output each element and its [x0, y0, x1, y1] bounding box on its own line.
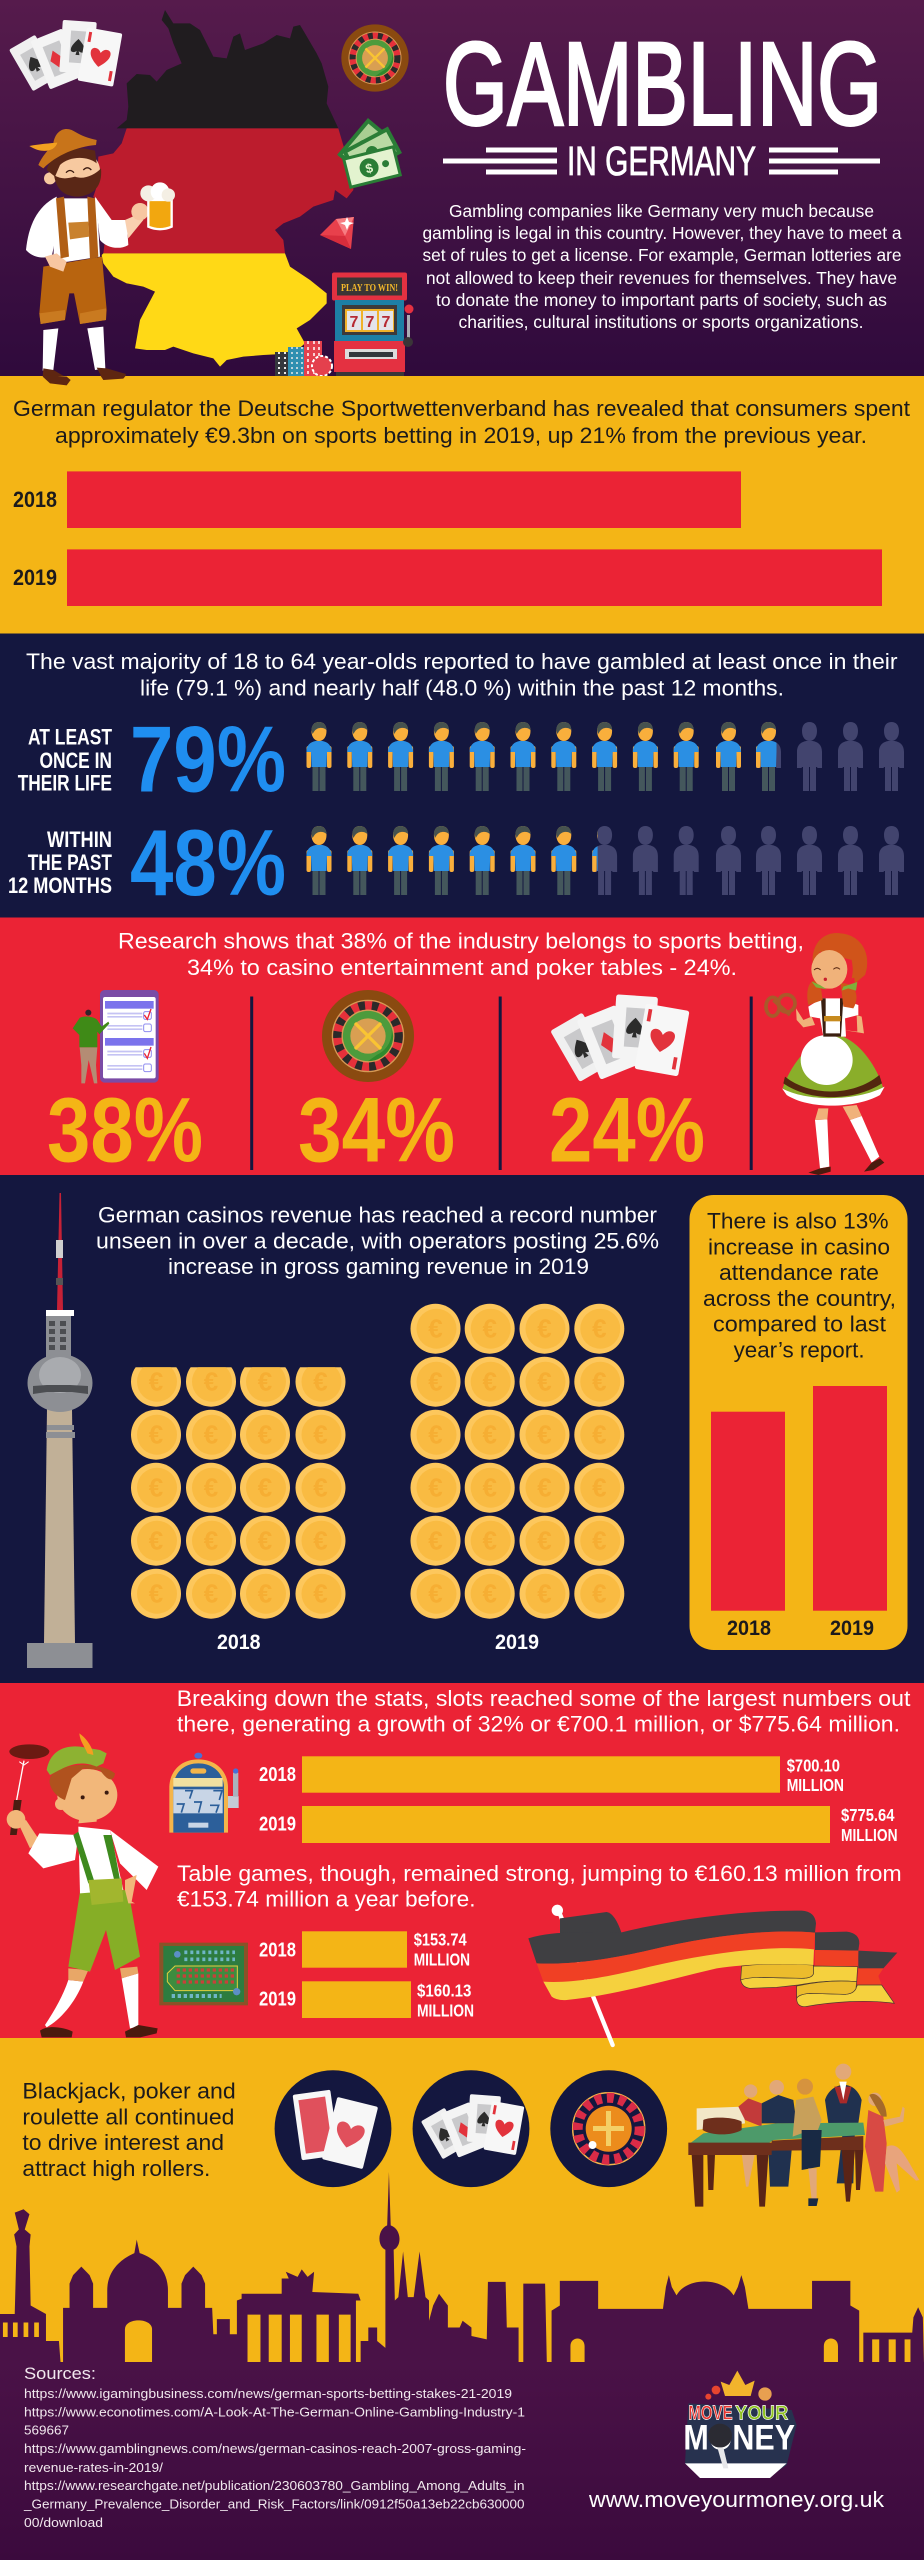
icon: casino chips: [275, 341, 332, 377]
bar chart: table games: MILLION: [417, 2001, 474, 2021]
icon: roulette wheel: [322, 990, 414, 1082]
coin stack: 2019: €: [592, 1314, 607, 1344]
label: at least once: AT LEAST: [28, 724, 112, 749]
illustration: Berlin skyline: [0, 2172, 924, 2365]
bar chart: sports betting: 2018: [13, 487, 57, 512]
stat: 48%: 48%: [130, 810, 286, 915]
sources: revenue-rates-in-2019/: [24, 2461, 164, 2475]
coin stack: 2018: €: [313, 1579, 328, 1609]
icon: banknotes: [337, 118, 402, 189]
illustration: casino table with people: [688, 2064, 919, 2207]
coin stack: 2019: €: [537, 1473, 552, 1503]
map of Germany in flag colours: [93, 10, 353, 367]
sources: https://www.gamblingnews.com/news/german-casinos-reach-2007-gross-gaming-: [24, 2442, 526, 2456]
sources: Sources:: [24, 2364, 96, 2383]
coin stack: 2019: €: [592, 1420, 607, 1450]
label: at least once: THEIR LIFE: [18, 771, 112, 796]
icon: roulette table: [159, 1943, 248, 2005]
coin stack: 2018: €: [313, 1367, 328, 1397]
coin stack: 2018: €: [204, 1579, 218, 1609]
casino revenue text: increase in gross gaming revenue in 2019: [168, 1254, 589, 1279]
icon: two cards in circle: [275, 2070, 391, 2187]
slots text: Breaking down the stats, slots reached some of the largest numbers out: [177, 1686, 910, 1711]
sources: https://www.igamingbusiness.com/news/german-sports-betting-stakes-21-2019: [24, 2387, 512, 2401]
bar chart: slots: MILLION: [841, 1825, 898, 1845]
stat: 79%: 79%: [130, 706, 286, 811]
coin stack: 2019: €: [537, 1314, 552, 1344]
stat: 24%: 24%: [549, 1079, 705, 1181]
bar chart: attendance: [711, 1386, 887, 1640]
coin stack: 2018: €: [258, 1473, 272, 1503]
icon: playing cards: [9, 20, 122, 91]
attendance text: across the country,: [703, 1286, 896, 1311]
table games text: Table games, though, remained strong, jumping to €160.13 million from: [177, 1861, 902, 1886]
logo: Move Your Money: [683, 2371, 797, 2478]
attendance text: increase in casino: [708, 1234, 890, 1259]
high rollers text: roulette all continued: [22, 2105, 234, 2130]
icon: betting slip phone: [73, 990, 159, 1083]
share text: 34% to casino entertainment and poker tables - 24%.: [187, 955, 737, 980]
coin labels: 2018: [217, 1631, 261, 1654]
bar chart: sports betting: [13, 471, 882, 606]
bar chart: slots: $775.64: [841, 1805, 895, 1825]
bar chart: table games: 2018: [259, 1940, 296, 1962]
coin stack: 2018: €: [258, 1579, 272, 1609]
intro paragraph: [422, 201, 902, 332]
attendance text: year’s report.: [734, 1338, 865, 1363]
coin stack: 2018: €: [313, 1526, 328, 1556]
attendance text: [703, 1208, 896, 1363]
label: within past 12 months: [8, 827, 112, 898]
coin stack: 2019: €: [482, 1473, 497, 1503]
bar chart: slots: $700.10: [787, 1756, 840, 1776]
prevalence text: life (79.1 %) and nearly half (48.0 %) within the past 12 months.: [140, 676, 784, 701]
sources: [23, 2364, 526, 2530]
coin stack: 2019: €: [537, 1420, 552, 1450]
sources: 00/download: [24, 2516, 103, 2530]
logo: Move Your Money: MONEY: [683, 2418, 795, 2457]
panel: sports betting: [0, 374, 924, 634]
slots text: there, generating a growth of 32% or €700.1 million, or $775.64 million.: [177, 1712, 900, 1737]
coin stack: 2019: €: [592, 1579, 607, 1609]
coin stack: 2019: €: [428, 1314, 443, 1344]
coin labels: 2019: [495, 1631, 539, 1654]
coin stack: 2018: €: [258, 1526, 272, 1556]
coin stack: 2018: €: [204, 1473, 218, 1503]
table games text: [177, 1861, 902, 1912]
label: within past 12 months: WITHIN: [47, 827, 112, 852]
icon: ruby gem: [320, 217, 354, 249]
icon: roulette wheel: [341, 24, 409, 92]
sports betting text: [13, 396, 910, 448]
icon: slot machine: 7: [366, 314, 375, 331]
bar chart: slots: [259, 1756, 898, 1845]
panel: casino revenue: [0, 1175, 924, 1683]
bar chart: table games: $153.74: [414, 1930, 467, 1950]
casino revenue text: German casinos revenue has reached a record number: [98, 1203, 657, 1228]
sports betting text: German regulator the Deutsche Sportwettenverband has revealed that consumers spent: [13, 396, 910, 421]
coin stack: 2018: €: [204, 1526, 218, 1556]
card: attendance: [690, 1195, 908, 1650]
illustration: boy with sausage: [7, 1733, 158, 2037]
coin stack: 2018: [131, 1357, 346, 1619]
bar chart: table games: 2019: [259, 1989, 296, 2011]
bar chart: sports betting: 2019: [13, 565, 57, 590]
prevalence text: [26, 649, 897, 701]
label: within past 12 months: 12 MONTHS: [8, 873, 112, 898]
sources: https://www.econotimes.com/A-Look-At-The-German-Online-Gambling-Industry-1: [24, 2405, 525, 2419]
coin stack: 2019: €: [592, 1367, 607, 1397]
icon: roulette in circle: [550, 2070, 667, 2187]
coin stack: 2019: €: [592, 1526, 607, 1556]
illustration: Berlin TV tower: [27, 1193, 92, 1668]
coin stack: 2019: €: [482, 1420, 497, 1450]
icon: slot machine: 7: [382, 314, 391, 331]
bar chart: attendance: 2018: [727, 1617, 771, 1640]
logo: Move Your Money: YOUR: [735, 2401, 788, 2424]
intro paragraph: set of rules to get a license. For example, German lotteries are: [422, 245, 902, 265]
intro paragraph: not allowed to keep their revenues for themselves. They have: [426, 268, 897, 288]
coin stack: 2019: [410, 1304, 624, 1619]
coin stack: 2019: €: [482, 1367, 497, 1397]
coin stack: 2019: €: [537, 1526, 552, 1556]
stat: 34%: 34%: [298, 1079, 455, 1181]
coin stack: 2018: €: [313, 1420, 328, 1450]
casino revenue text: [96, 1203, 659, 1279]
coin stack: 2018: €: [149, 1526, 163, 1556]
coin stack: 2019: €: [482, 1579, 497, 1609]
coin stack: 2018: €: [258, 1420, 272, 1450]
coin stack: 2018: €: [149, 1473, 163, 1503]
label: within past 12 months: THE PAST: [28, 850, 112, 875]
coin stack: 2018: €: [204, 1367, 218, 1397]
icon: banknotes: $: [364, 160, 375, 176]
slots text: [177, 1686, 910, 1737]
intro paragraph: to donate the money to important parts of society, such as: [436, 290, 887, 310]
attendance text: attendance rate: [719, 1260, 879, 1285]
casino revenue text: unseen in over a decade, with operators posting 25.6%: [96, 1228, 659, 1253]
coin stack: 2019: €: [482, 1526, 497, 1556]
coin stack: 2019: €: [428, 1367, 443, 1397]
man's shoe over panel edge: [43, 374, 126, 385]
bar chart: slots: 2018: [259, 1764, 296, 1786]
intro paragraph: charities, cultural institutions or sports organizations.: [458, 312, 864, 332]
bar chart: slots: 2019: [259, 1814, 296, 1836]
icon: slot machine: [332, 272, 414, 377]
coin stack: 2018: €: [204, 1420, 218, 1450]
illustration: woman with pretzel: [766, 933, 885, 1175]
logo: Move Your Money: MOVE: [688, 2401, 733, 2424]
sources: https://www.researchgate.net/publication/230603780_Gambling_Among_Adults_in: [24, 2479, 525, 2493]
subtitle with rules: IN GERMANY: [567, 138, 756, 184]
stat: 38%: 38%: [47, 1079, 203, 1181]
coin stack: 2019: €: [428, 1420, 443, 1450]
intro paragraph: gambling is legal in this country. However, they have to meet a: [422, 223, 902, 243]
attendance text: compared to last: [713, 1312, 886, 1337]
coin stack: 2019: €: [592, 1473, 607, 1503]
coin stack: 2019: €: [537, 1367, 552, 1397]
label: at least once: [18, 724, 112, 796]
panel: industry share: [0, 918, 924, 1181]
pictogram row: 48%: [306, 826, 904, 895]
icon: slot machine: PLAY TO WIN!: [341, 283, 398, 294]
coin stack: 2018: €: [149, 1420, 163, 1450]
table games text: €153.74 million a year before.: [177, 1887, 476, 1912]
icon: slot machine: 7: [350, 314, 359, 331]
coin stack: 2019: €: [537, 1579, 552, 1609]
icon: slot machine: [169, 1753, 239, 1833]
intro paragraph: Gambling companies like Germany very much because: [449, 201, 874, 221]
bar chart: table games: [259, 1930, 474, 2021]
attendance text: There is also 13%: [707, 1208, 889, 1233]
bar chart: attendance: 2019: [830, 1617, 874, 1640]
sports betting text: approximately €9.3bn on sports betting in 2019, up 21% from the previous year.: [55, 423, 867, 448]
high rollers text: [22, 2079, 236, 2181]
coin stack: 2019: €: [482, 1314, 497, 1344]
coin stack: 2018: €: [149, 1367, 163, 1397]
panel: high rollers: [0, 1905, 924, 2368]
label: at least once: ONCE IN: [40, 748, 112, 773]
coin stack: 2019: €: [428, 1526, 443, 1556]
prevalence text: The vast majority of 18 to 64 year-olds reported to have gambled at least once in their: [26, 649, 897, 674]
bar chart: table games: MILLION: [414, 1949, 470, 1969]
icon: playing cards: [550, 994, 690, 1082]
panel: slots and table games: [0, 1683, 924, 2038]
icon: four cards in circle: [413, 2070, 529, 2187]
panel: prevalence: [0, 634, 924, 918]
bar chart: table games: $160.13: [417, 1981, 472, 2001]
coin stack: 2019: €: [428, 1473, 443, 1503]
coin stack: 2018: €: [258, 1367, 272, 1397]
panel: header: [0, 0, 924, 385]
sources: _Germany_Prevalence_Disorder_and_Risk_Factors/link/0912f50a13eb22cb630000: [23, 2498, 525, 2512]
website: www.moveyourmoney.org.uk: [588, 2487, 885, 2512]
dividers: [250, 996, 753, 1170]
share text: [118, 928, 804, 980]
high rollers text: to drive interest and: [22, 2130, 224, 2155]
panel: footer: [0, 2362, 924, 2560]
coin stack: 2018: €: [313, 1473, 328, 1503]
pictogram row: 79%: [306, 722, 904, 791]
illustration: German flag: [528, 1905, 897, 2045]
illustration: man with beer: [26, 129, 175, 385]
share text: Research shows that 38% of the industry belongs to sports betting,: [118, 928, 804, 954]
high rollers text: attract high rollers.: [22, 2156, 210, 2181]
coin labels: [217, 1631, 539, 1654]
bar chart: slots: MILLION: [787, 1775, 844, 1795]
coin stack: 2018: €: [149, 1579, 163, 1609]
subtitle with rules: [443, 138, 880, 184]
sources: 569667: [24, 2424, 69, 2438]
coin stack: 2019: €: [428, 1579, 443, 1609]
high rollers text: Blackjack, poker and: [22, 2079, 236, 2104]
